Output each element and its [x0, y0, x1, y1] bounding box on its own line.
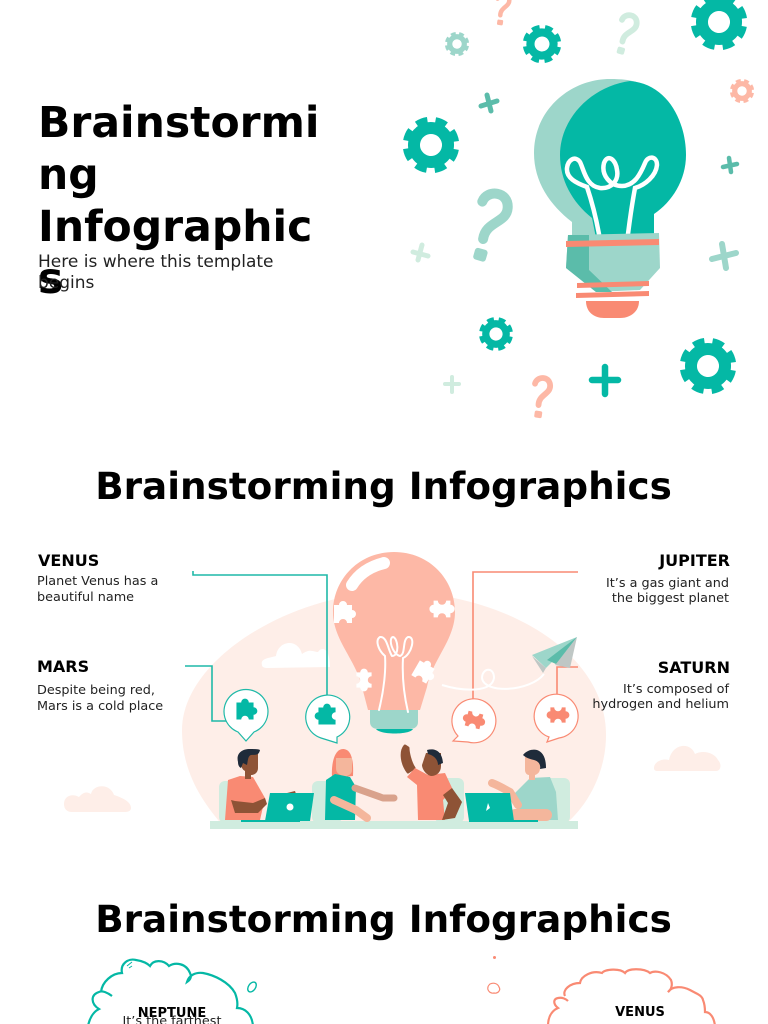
speech bubble 3 [452, 699, 496, 743]
icon: clouds [64, 746, 720, 812]
person 3 [402, 746, 462, 820]
icon: scattered gears [402, 0, 754, 395]
thought cloud: Neptune: NEPTUNE [138, 1006, 206, 1021]
title: Brainstormi [38, 99, 319, 148]
title: Infographic [38, 203, 312, 252]
title: ng [38, 151, 99, 200]
speech bubble 1 [224, 690, 268, 741]
icon: plus signs [413, 95, 737, 394]
person 1 [225, 749, 296, 820]
subtitle: Here is where this template [38, 252, 274, 272]
text: Venus [37, 551, 158, 605]
text: Saturn: hydrogen and helium [592, 697, 729, 712]
thought cloud: Venus [488, 956, 715, 1024]
background blob [182, 592, 606, 828]
subtitle: begins [38, 273, 95, 293]
text: Mars: Despite being red, [37, 683, 155, 698]
icon: paper plane [532, 637, 577, 673]
thought cloud: Venus: VENUS [615, 1005, 665, 1020]
laptop 1 [241, 793, 314, 822]
icon: question marks [472, 0, 638, 418]
person 4 [492, 750, 558, 820]
speech bubble 4 [534, 694, 578, 742]
icon: people chairs and table [210, 778, 578, 829]
icon: main light bulb [534, 79, 686, 318]
text: Venus: VENUS [38, 551, 99, 570]
text: Saturn: It’s composed of [623, 682, 729, 697]
title: s [38, 255, 63, 304]
speech bubble 2 [306, 695, 350, 743]
heading: third section: Brainstorming Infographics [95, 897, 672, 941]
text: Jupiter: the biggest planet [612, 591, 729, 606]
heading: second section: Brainstorming Infographics [95, 464, 672, 508]
text: Venus: beautiful name [37, 590, 134, 605]
text: Mars [37, 657, 163, 714]
thought cloud: Neptune [88, 960, 258, 1024]
text: Saturn [592, 658, 730, 712]
text: Mars: MARS [37, 657, 89, 676]
connector lines [185, 571, 578, 721]
person 2 [325, 749, 394, 820]
laptop 2 [465, 793, 538, 822]
text: Jupiter: JUPITER [658, 551, 730, 570]
text: Venus: Planet Venus has a [37, 574, 158, 589]
text: Jupiter [606, 551, 730, 606]
icon: white cloud [262, 643, 330, 668]
curly flight path [442, 670, 544, 690]
text: Mars: Mars is a cold place [37, 699, 163, 714]
big light bulb [333, 552, 455, 734]
text: Saturn: SATURN [658, 658, 730, 677]
text: Jupiter: It’s a gas giant and [606, 576, 729, 591]
